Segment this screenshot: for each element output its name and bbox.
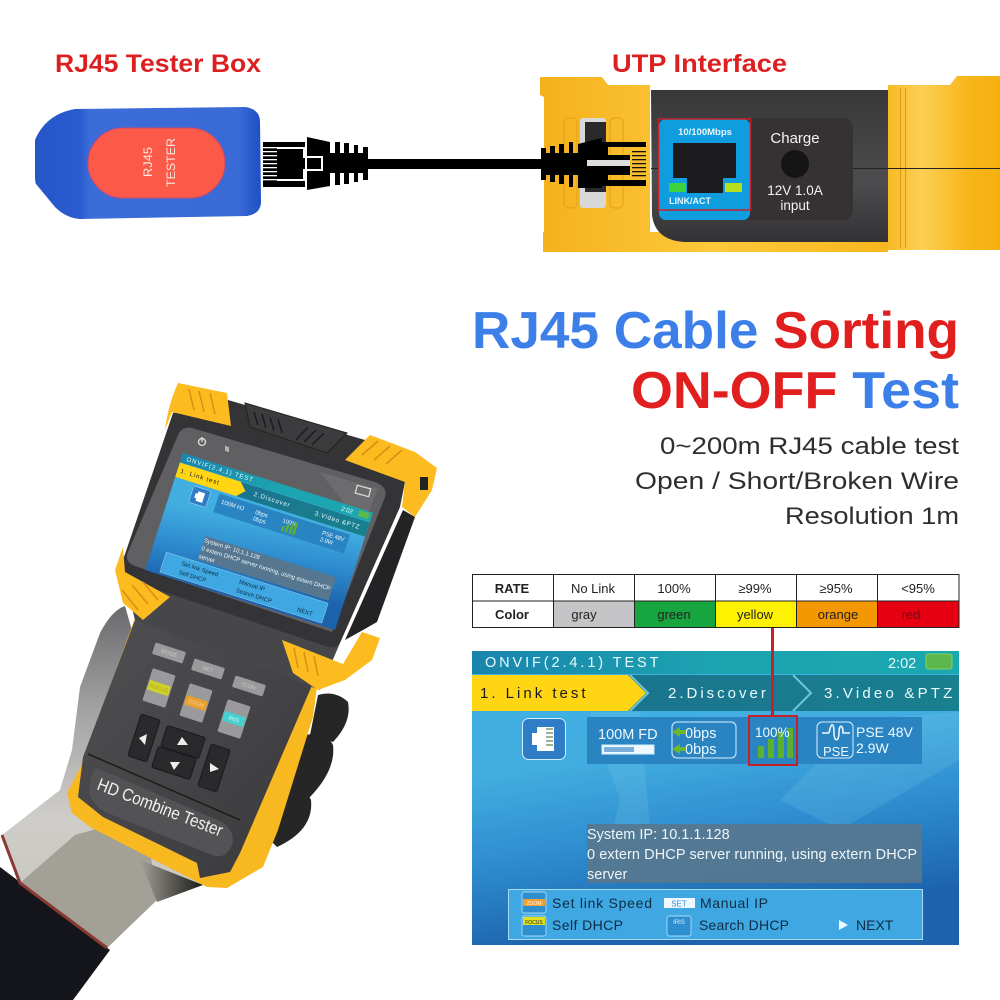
spec text: 0~200m RJ45 cable test xyxy=(660,433,959,460)
title xyxy=(472,302,959,420)
hand device screen: ONVIF(2.4.1) TEST xyxy=(185,456,255,484)
gloved hand xyxy=(0,606,349,1000)
nav tabs xyxy=(472,675,959,711)
device: UTP interface side view xyxy=(520,76,1000,252)
hand device screen xyxy=(145,453,373,630)
table: rate colors: No Link xyxy=(571,581,616,596)
charge panel: 12V 1.0A xyxy=(767,183,823,198)
bottom controls: Search DHCP xyxy=(699,917,789,933)
spec text: Open / Short/Broken Wire xyxy=(635,468,959,495)
bottom controls: FOCUS xyxy=(525,920,543,926)
charge panel: input xyxy=(780,198,810,213)
port panel: 10/100Mbps xyxy=(678,127,732,138)
key labels: FOCUS xyxy=(149,683,169,695)
table: rate colors: gray xyxy=(571,607,597,622)
table: rate colors: ≥95% xyxy=(819,581,853,596)
table: rate colors: orange xyxy=(818,607,858,622)
cable plug right xyxy=(520,138,646,188)
hand device screen: 0 extern DHCP server running, using extern DHCP xyxy=(200,546,331,592)
nav tabs: 3.Video &PTZ xyxy=(824,685,956,702)
spec text xyxy=(635,433,959,530)
hand device screen: 2:02 xyxy=(340,505,354,516)
key labels: ZOOM xyxy=(187,699,205,709)
bottom controls: NEXT xyxy=(856,917,894,933)
status bar: 2.9W xyxy=(856,740,889,756)
tester upper body xyxy=(115,383,437,690)
table: rate colors: ≥99% xyxy=(738,581,772,596)
hand device screen: 0bps xyxy=(254,510,268,520)
bottom controls: ZOOM xyxy=(526,901,542,907)
charge panel: Charge xyxy=(770,130,820,147)
yellow corner bumpers xyxy=(165,383,231,430)
info box: 0 extern DHCP server running, using extern DHCP xyxy=(587,847,917,863)
label: RJ45 TESTER: RJ45 xyxy=(143,147,155,177)
cable plug left xyxy=(263,137,547,190)
top grip xyxy=(245,403,347,453)
info box: server xyxy=(587,867,627,883)
table: rate colors: 100% xyxy=(657,581,691,596)
charge panel xyxy=(700,118,853,220)
hand device screen: NEXT xyxy=(296,607,313,618)
hand device screen: 3.Video &PTZ xyxy=(314,510,361,531)
hand device screen: Set link Speed xyxy=(180,561,219,579)
table: rate colors: green xyxy=(657,607,691,622)
status bar: 100% xyxy=(755,725,790,740)
info box: System IP: 10.1.1.128 xyxy=(587,827,730,843)
side connectors xyxy=(345,510,415,640)
table: rate colors xyxy=(472,574,959,628)
hand device screen: PSE 48V xyxy=(321,531,345,543)
table: rate colors: Color xyxy=(495,607,529,622)
port panel xyxy=(658,119,750,220)
hand device screen: server xyxy=(198,554,215,565)
table: rate colors: RATE xyxy=(495,581,530,596)
status bar: 0bps xyxy=(685,742,716,758)
key labels: IRIS xyxy=(228,715,240,725)
key labels xyxy=(147,649,256,727)
status bar: PSE 48V xyxy=(856,724,913,740)
bottom controls: IRIS xyxy=(673,920,685,926)
table: rate colors: yellow xyxy=(737,607,774,622)
sleeve xyxy=(0,867,110,1000)
port panel: LINK/ACT xyxy=(669,196,711,206)
status bar: 100M FD xyxy=(598,727,658,743)
hand device screen: Search DHCP xyxy=(235,588,272,605)
brand plate: HD Combine Tester xyxy=(95,774,226,840)
label: RJ45 TESTER: TESTER xyxy=(166,138,178,187)
header bar xyxy=(472,651,959,674)
hand device screen: System IP: 10.1.1.128 xyxy=(203,538,261,562)
info box xyxy=(587,824,922,883)
hand device screen: 2.9W xyxy=(319,537,334,547)
title: RJ45 Cable Sorting xyxy=(472,302,959,360)
tester lower body xyxy=(67,618,317,888)
bottom controls: Manual IP xyxy=(700,895,768,911)
RJ45 icon xyxy=(522,718,566,760)
spec text: Resolution 1m xyxy=(785,503,959,530)
heading: RJ45 Tester Box: RJ45 Tester Box xyxy=(55,50,261,78)
hand device screen: Manual IP xyxy=(238,579,265,593)
hand device screen: 0bps xyxy=(252,516,266,526)
red link line xyxy=(749,628,797,765)
hand device screen: 100M HJ xyxy=(220,500,245,513)
RJ45 tester box xyxy=(35,107,261,219)
hand device screen: 100% xyxy=(282,518,297,528)
status bar xyxy=(587,717,922,764)
bottom controls: Self DHCP xyxy=(552,917,623,933)
table: rate colors: red xyxy=(902,607,920,622)
screen: ONVIF test xyxy=(472,651,959,945)
fingers xyxy=(270,694,349,847)
table: rate colors: <95% xyxy=(901,581,935,596)
arrow keys xyxy=(128,714,230,792)
header bar: 2:02 xyxy=(888,656,916,672)
hand device screen: 1. Link test xyxy=(179,468,221,487)
status bar: PSE xyxy=(823,744,849,759)
title: ON-OFF Test xyxy=(631,362,959,420)
key labels: MODE xyxy=(160,649,178,659)
key labels: ICON xyxy=(241,682,256,692)
bottom controls: SET xyxy=(671,900,687,908)
key labels: SET xyxy=(202,665,214,675)
icon: power and arrows xyxy=(198,437,228,452)
nav tabs: 2.Discover xyxy=(668,685,769,702)
status bar: 0bps xyxy=(685,726,716,742)
hand device screen: Self DHCP xyxy=(178,570,207,584)
header bar: ONVIF(2.4.1) TEST xyxy=(485,655,661,671)
label: RJ45 TESTER xyxy=(143,138,178,187)
keypad buttons xyxy=(142,642,266,739)
heading: UTP Interface: UTP Interface xyxy=(612,50,787,78)
nav tabs: 1. Link test xyxy=(480,685,589,702)
bottom controls xyxy=(508,890,922,940)
hand device screen: 2.Discover xyxy=(253,491,291,509)
grip ribs xyxy=(122,389,402,676)
bottom controls: Set link Speed xyxy=(552,895,652,911)
